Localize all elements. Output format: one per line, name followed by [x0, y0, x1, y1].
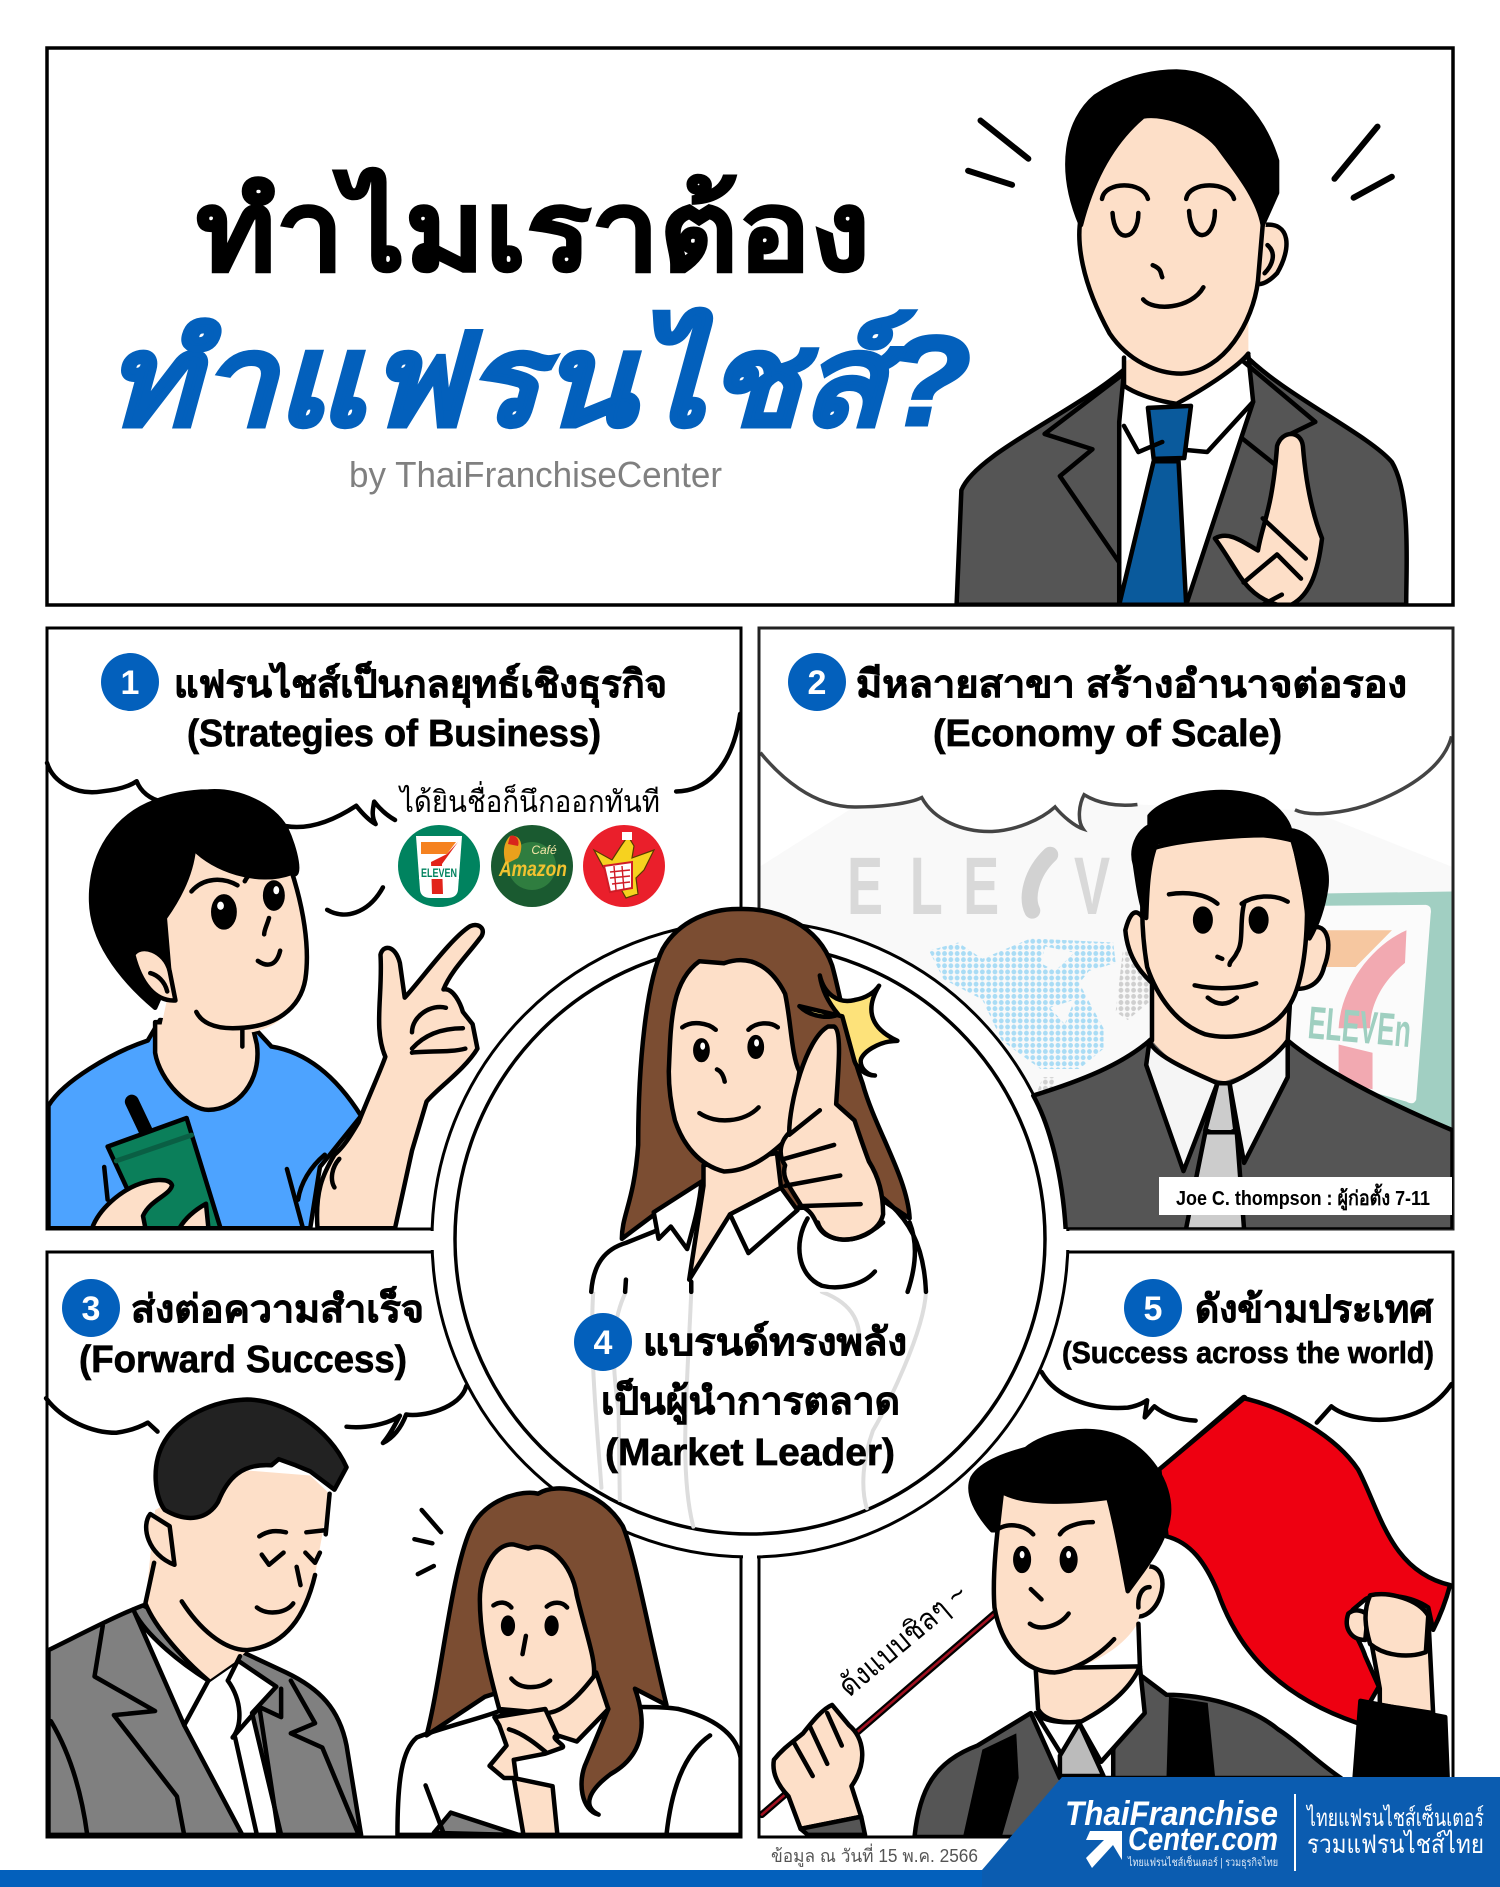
panel 1 heading: แฟรนไชส์เป็นกลยุทธ์เชิงธุรกิจ [174, 661, 667, 708]
number badge 3: 3 [82, 1290, 100, 1328]
name label: Joe C. thompson : ผู้ก่อตั้ง 7-11 [1176, 1183, 1430, 1212]
footer band: ไทยแฟรนไชส์เซ็นเตอร์ | รวมธุรกิจไทย [1127, 1855, 1278, 1869]
footer logo panel [982, 1777, 1500, 1887]
panel 2 frame and background: V [1074, 840, 1110, 932]
character: businessman pointing up [957, 72, 1407, 605]
brand recall caption: ได้ยินชื่อก็นึกออกทันที [398, 781, 660, 819]
title line 1: ทำไมเราต้อง [196, 168, 870, 294]
center heading: แบรนด์ทรงพลัง [643, 1321, 907, 1364]
panel 2 heading: (Economy of Scale) [933, 713, 1282, 755]
number badge 5 [1124, 1279, 1182, 1337]
logo: 7-Eleven [398, 825, 480, 907]
number badge 4: 4 [594, 1324, 613, 1362]
speech bubble lines panel 1 [47, 714, 740, 827]
panel 2 frame and background [760, 736, 1452, 1128]
panel 2 frame and background: L [910, 840, 943, 932]
character: boy in blue shirt [48, 791, 483, 1228]
panel 5 heading: ดังข้ามประเทศ [1195, 1289, 1434, 1331]
panel 2 heading [788, 653, 1407, 755]
character: founder in suit [1033, 792, 1453, 1229]
logo: 7-Eleven: ELEVEN [421, 866, 457, 880]
number badge 4 [574, 1313, 632, 1371]
character: woman pointing [591, 909, 926, 1527]
number badge 1 [101, 653, 159, 711]
panel 2 frame and background: ELEVEn [1306, 996, 1413, 1057]
footer band: Center.com [1128, 1821, 1278, 1857]
logo wordmark: ThaiFranchise [1065, 1795, 1278, 1833]
rotated caption: ดังแบบชิลๆ ~ [832, 1577, 974, 1703]
header panel [47, 48, 1453, 605]
inner circle [455, 944, 1045, 1534]
number badge 3 [62, 1279, 120, 1337]
byline: by ThaiFranchiseCenter [349, 454, 722, 495]
number badge 1: 1 [121, 664, 139, 702]
panel 2 heading: มีหลายสาขา สร้างอำนาจต่อรอง [856, 664, 1407, 706]
panel 1 frame [47, 628, 741, 1229]
center heading [574, 1313, 907, 1474]
panel 2 frame and background: E [847, 840, 883, 932]
outer circle ring [432, 921, 1068, 1557]
logo: Cafe Amazon: Amazon [498, 858, 567, 881]
center heading: เป็นผู้นำการตลาด [601, 1378, 900, 1425]
date note: ข้อมูล ณ วันที่ 15 พ.ค. 2566 [771, 1843, 978, 1867]
panel 5 heading [1062, 1279, 1434, 1370]
speech bubble lines panel 5 [1041, 1372, 1452, 1423]
ring gaps between panels [426, 912, 1074, 1565]
character: man with closed eyes [48, 1399, 741, 1835]
panel 3 heading [62, 1279, 424, 1381]
title line 2: ทำแฟรนไชส์? [105, 308, 971, 453]
panel 5 frame [759, 1252, 1453, 1837]
panel 3 heading: ส่งต่อความสำเร็จ [131, 1286, 424, 1331]
name label [1159, 1177, 1452, 1215]
panel 3 frame [47, 1252, 741, 1837]
panel 3 heading: (Forward Success) [79, 1339, 407, 1381]
panel 5 heading: (Success across the world) [1062, 1335, 1434, 1370]
panel 1 heading: (Strategies of Business) [187, 713, 601, 755]
logo: chicken mascot [583, 825, 665, 907]
footer band [0, 1777, 1500, 1887]
number badge 5: 5 [1144, 1290, 1162, 1328]
speech bubble lines panel 3 [46, 1386, 466, 1443]
center heading: (Market Leader) [605, 1432, 895, 1474]
character: man with red flag [762, 1398, 1450, 1837]
logo: Cafe Amazon [491, 825, 573, 907]
panel 2 frame and background: E [963, 840, 999, 932]
number badge 2: 2 [808, 664, 826, 702]
icon: logo arrow [1086, 1831, 1122, 1868]
logo: Cafe Amazon: Café [531, 843, 557, 857]
number badge 2 [788, 653, 846, 711]
panel 1 heading [101, 653, 667, 755]
